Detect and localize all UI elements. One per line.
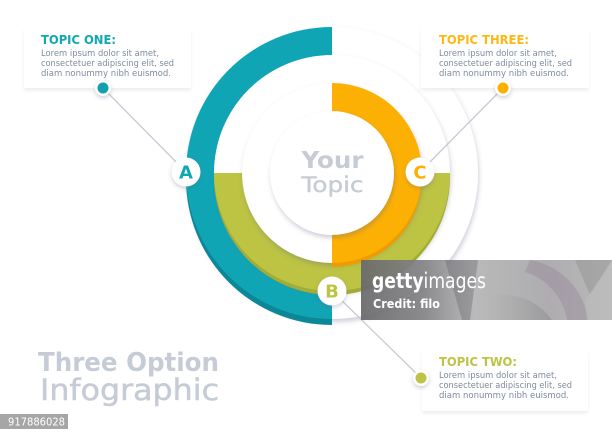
- body: topic three: Lorem ipsum dolor sit amet,: [439, 48, 557, 58]
- heading: topic two: TOPIC TWO:: [439, 355, 517, 369]
- badge B: [318, 276, 346, 306]
- back white disc: [186, 27, 478, 319]
- heading: topic three: TOPIC THREE:: [439, 33, 529, 47]
- badge C: C: [413, 162, 427, 184]
- ring: teal outer half: [186, 27, 332, 325]
- ring: white inner disc: [242, 83, 422, 263]
- center circle: [270, 111, 394, 235]
- body: topic three: diam nonummy nibh euismod.: [439, 68, 569, 78]
- image id tag: 917886028: [8, 416, 65, 428]
- dot: topic two: [413, 370, 429, 386]
- body: topic two: diam nonummy nibh euismod.: [439, 390, 569, 400]
- panel: topic three: [421, 28, 589, 96]
- badge B: B: [325, 282, 339, 302]
- watermark credit: Credit: filo: [373, 296, 440, 311]
- body: topic two: Lorem ipsum dolor sit amet,: [439, 370, 557, 380]
- body: topic two: [439, 370, 572, 400]
- ring: olive lower half: [214, 173, 450, 295]
- watermark banner: [361, 260, 612, 320]
- center text: Your: Your: [300, 148, 364, 174]
- body: topic one: diam nonummy nibh euismod.: [41, 68, 171, 78]
- heading: topic one: TOPIC ONE:: [41, 33, 116, 47]
- badge A: A: [179, 162, 193, 184]
- badge A: [172, 158, 200, 186]
- leader line A: [103, 88, 186, 172]
- title: Three Option: [38, 348, 219, 378]
- ring: orange right half: [332, 83, 422, 267]
- panel: topic two: [413, 350, 588, 411]
- body: topic three: consectetuer adipiscing elit, sed: [439, 58, 572, 68]
- badge C: [406, 158, 434, 186]
- watermark logo: gettyimages: [372, 269, 486, 293]
- title: Infographic: [40, 373, 219, 407]
- body: topic one: [41, 48, 174, 78]
- dot: topic three: [495, 80, 511, 96]
- diagram: concentric rings: [186, 27, 478, 325]
- body: topic one: Lorem ipsum dolor sit amet,: [41, 48, 159, 58]
- title: [38, 348, 219, 407]
- dot: topic one: [95, 80, 111, 96]
- body: topic three: [439, 48, 572, 78]
- body: topic one: consectetuer adipiscing elit, sed: [41, 58, 174, 68]
- ring: white middle disc: [214, 55, 450, 291]
- panel: topic one: [24, 28, 191, 96]
- body: topic two: consectetuer adipiscing elit, sed: [439, 380, 572, 390]
- leader line B: [332, 291, 421, 378]
- center text: Topic: Topic: [300, 173, 364, 197]
- leader line C: [420, 88, 503, 172]
